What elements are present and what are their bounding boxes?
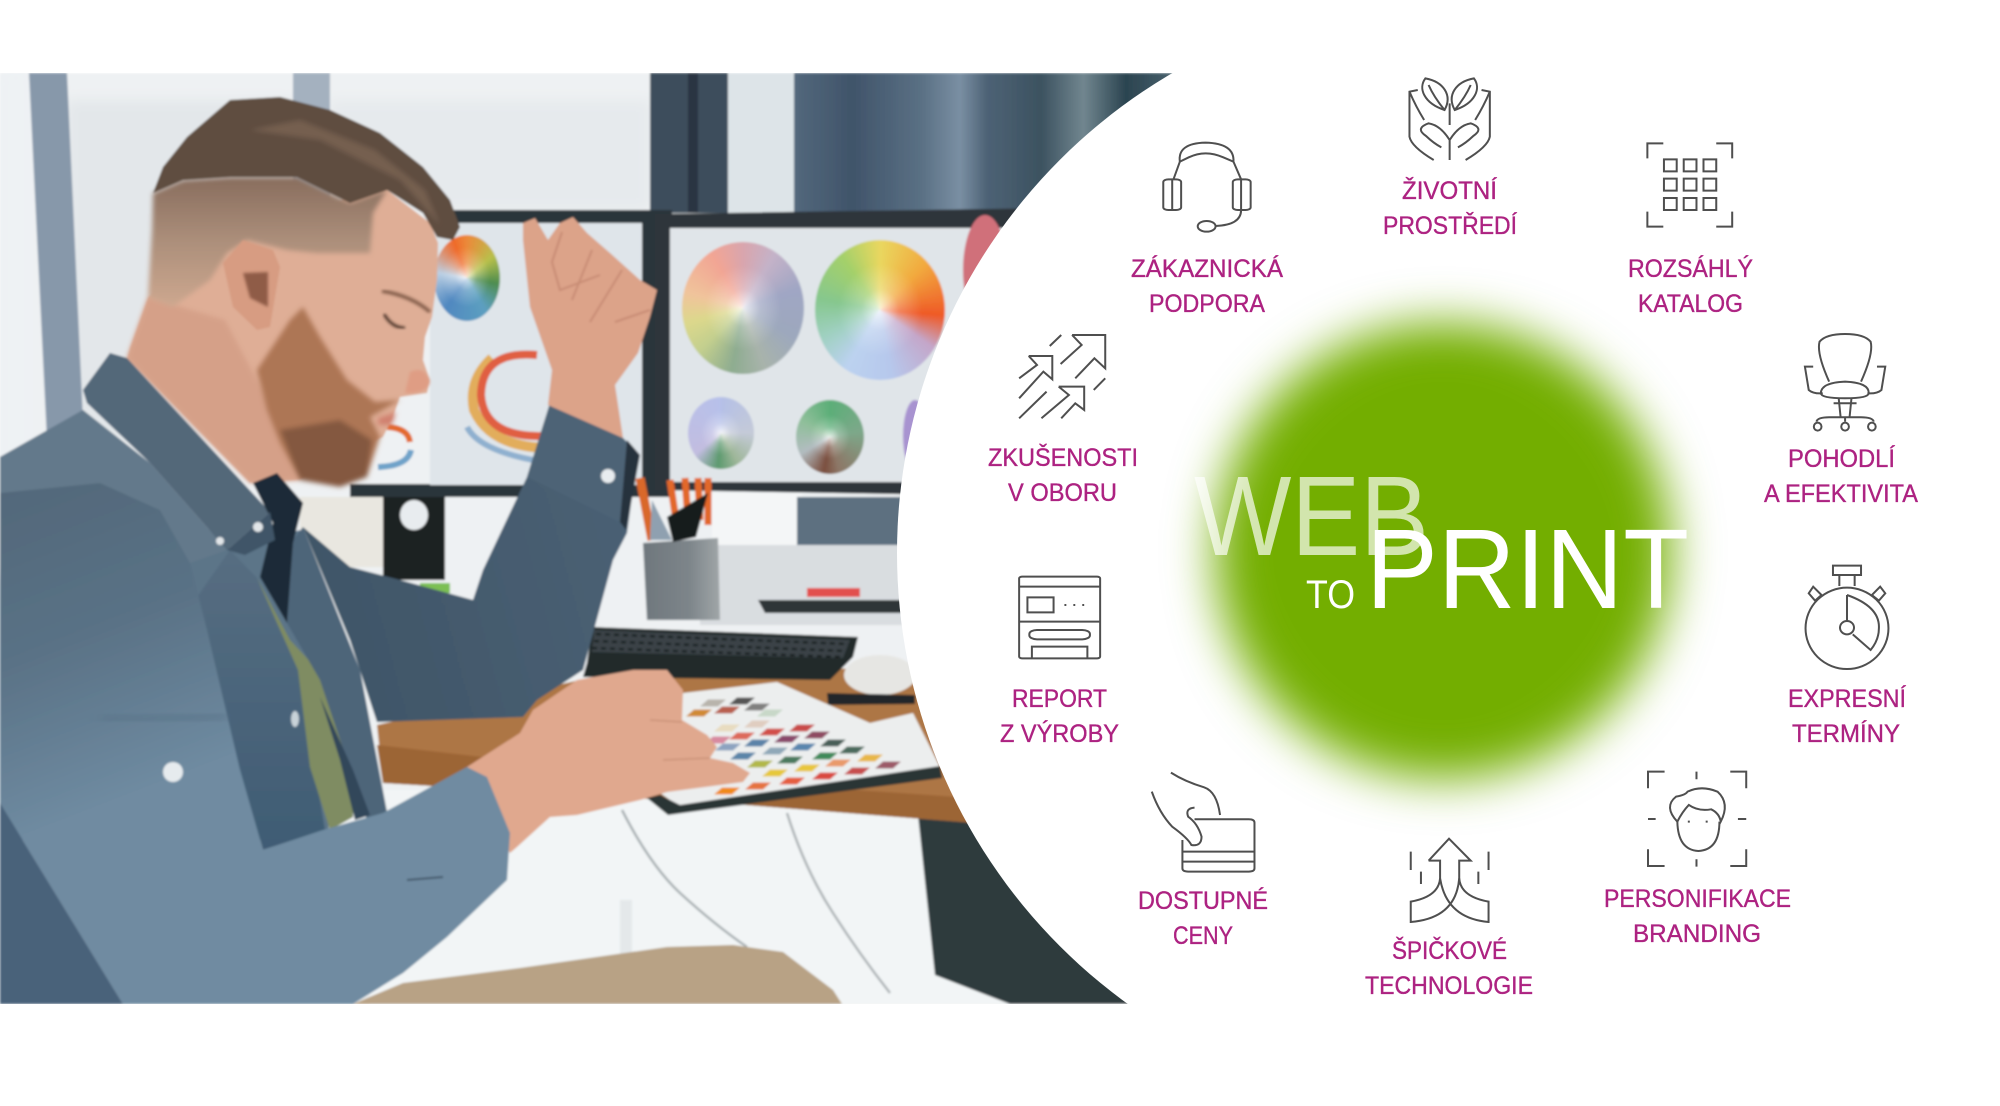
item: express deadlines: EXPRESNÍ — [1788, 684, 1906, 713]
item: personalisation and branding: PERSONIFIKACE — [1604, 885, 1791, 913]
man: sleeve with rolled cuff — [0, 410, 510, 1004]
item: wide catalogue — [1628, 143, 1753, 318]
item: experience: V OBORU — [1008, 479, 1117, 507]
keyboard — [583, 627, 858, 680]
item: comfort: A EFEKTIVITA — [1764, 480, 1918, 508]
item: cutting-edge technology: TECHNOLOGIE — [1365, 972, 1533, 1000]
title: web to print: TO — [1306, 573, 1355, 617]
mouse and pen — [844, 655, 916, 695]
item: environment — [1383, 78, 1517, 240]
item: customer support: PODPORA — [1149, 290, 1265, 318]
man: beard — [257, 307, 400, 487]
man: ear — [223, 240, 280, 330]
item: production report: REPORT — [1012, 685, 1107, 713]
title: web to print — [1194, 453, 1689, 632]
item: experience: ZKUŠENOSTI — [988, 443, 1138, 472]
icon: hand with card — [1152, 773, 1254, 872]
item: personalisation and branding — [1604, 772, 1791, 948]
item: cutting-edge technology: ŠPIČKOVÉ — [1392, 936, 1507, 965]
item: affordable prices: CENY — [1173, 922, 1233, 950]
icon: rising arrows — [1019, 335, 1105, 418]
white circle panel — [897, 0, 2000, 1106]
icon: merging arrows — [1411, 839, 1489, 922]
item: customer support: ZÁKAZNICKÁ — [1131, 254, 1283, 283]
colour chart — [647, 682, 942, 815]
man: torso — [188, 526, 388, 852]
item: express deadlines: TERMÍNY — [1792, 719, 1900, 748]
item: affordable prices — [1138, 773, 1268, 950]
item: experience — [988, 335, 1138, 507]
item: comfort — [1764, 334, 1918, 508]
item: wide catalogue: KATALOG — [1638, 290, 1743, 318]
icon: stopwatch — [1806, 566, 1888, 669]
window frame and curtains — [29, 73, 1254, 440]
icon: printer — [1019, 577, 1100, 658]
item: production report — [1000, 577, 1119, 748]
title: web to print: PRINT — [1366, 506, 1689, 632]
item: cutting-edge technology — [1365, 839, 1533, 1000]
item: production report: Z VÝROBY — [1000, 719, 1119, 748]
wall under desk, cables and tower — [1008, 1002, 1128, 1004]
man: eye and brow — [382, 291, 430, 328]
man: neck and face — [127, 190, 438, 483]
item: environment: PROSTŘEDÍ — [1383, 211, 1517, 240]
chart rings on left monitor — [378, 354, 545, 467]
icon: grid in frame — [1647, 143, 1732, 227]
title: web to print: WEB — [1194, 453, 1429, 579]
green glow circle — [1215, 323, 1671, 779]
item: customer support — [1131, 143, 1283, 318]
item: environment: ŽIVOTNÍ — [1402, 176, 1497, 205]
monitors — [299, 208, 1017, 625]
desk background items — [758, 600, 930, 613]
man: collar — [83, 353, 303, 623]
item: personalisation and branding: BRANDING — [1633, 920, 1761, 948]
icon: headset — [1163, 143, 1251, 232]
man: hand on paper — [467, 670, 750, 853]
item: comfort: POHODLÍ — [1788, 444, 1895, 473]
icon: hands with plant — [1409, 78, 1490, 160]
item: express deadlines — [1788, 566, 1906, 748]
item: affordable prices: DOSTUPNÉ — [1138, 886, 1268, 915]
man: hair — [148, 97, 460, 307]
icon: office chair — [1805, 334, 1885, 431]
man: lower sleeve behind hand — [302, 476, 632, 724]
man: raised hand — [523, 217, 657, 438]
icon: face in frame — [1648, 772, 1746, 867]
table — [376, 667, 954, 799]
colour wheels — [682, 242, 804, 374]
pen holder — [640, 478, 720, 620]
trousers — [353, 945, 842, 1004]
item: wide catalogue: ROZSÁHLÝ — [1628, 254, 1753, 283]
photo: designer at desk with colour charts — [0, 73, 1254, 1005]
